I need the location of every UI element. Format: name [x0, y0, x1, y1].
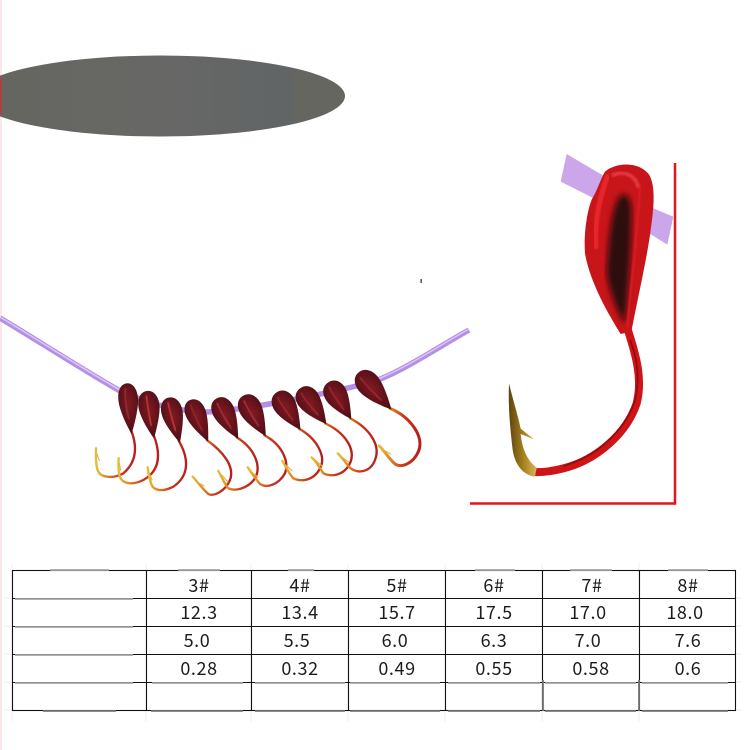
length row: 13.4 — [281, 599, 319, 625]
grey ellipse mask — [0, 56, 345, 136]
small dark speck — [420, 279, 422, 283]
length row: 15.7 — [378, 599, 416, 625]
red hook wire — [532, 328, 639, 472]
size row: 7# — [581, 572, 603, 598]
width row: 7.6 — [675, 627, 701, 653]
weight row: 0.49 — [378, 655, 416, 681]
purple tube piece — [561, 154, 673, 245]
hook barbs — [97, 449, 391, 486]
width row: 6.0 — [382, 627, 408, 653]
width row — [184, 627, 701, 653]
specification table — [4, 563, 742, 722]
weight row: 0.55 — [475, 655, 513, 681]
faint grid extensions — [4, 563, 742, 722]
size row: 5# — [386, 572, 408, 598]
hook wires — [96, 408, 420, 495]
length row: 17.0 — [569, 599, 607, 625]
red teardrop weight — [585, 165, 654, 334]
erased-label smudges — [15, 570, 728, 711]
weight row: 0.6 — [675, 655, 701, 681]
weight row: 0.28 — [180, 655, 218, 681]
width row: 5.5 — [284, 627, 310, 653]
size row: 6# — [483, 572, 505, 598]
length row — [180, 599, 704, 625]
width row: 6.3 — [481, 627, 507, 653]
weight row: 0.32 — [281, 655, 319, 681]
purple tube — [0, 317, 469, 412]
teardrop weights — [117, 365, 400, 446]
gold barbed point — [509, 383, 537, 477]
table grid — [12, 570, 736, 711]
size row: 8# — [677, 572, 699, 598]
product photo: ten hooks threaded on purple tube — [0, 317, 469, 495]
size row: 3# — [188, 572, 210, 598]
size row: 4# — [289, 572, 311, 598]
width row: 7.0 — [575, 627, 601, 653]
left edge tint — [0, 0, 2, 750]
close-up hook photo — [509, 154, 673, 477]
width row: 5.0 — [184, 627, 210, 653]
length row: 12.3 — [180, 599, 218, 625]
length row: 18.0 — [666, 599, 704, 625]
size row — [188, 572, 699, 598]
weight row: 0.58 — [572, 655, 610, 681]
length row: 17.5 — [475, 599, 513, 625]
weight row — [180, 655, 701, 681]
red dimension frame — [470, 163, 675, 504]
